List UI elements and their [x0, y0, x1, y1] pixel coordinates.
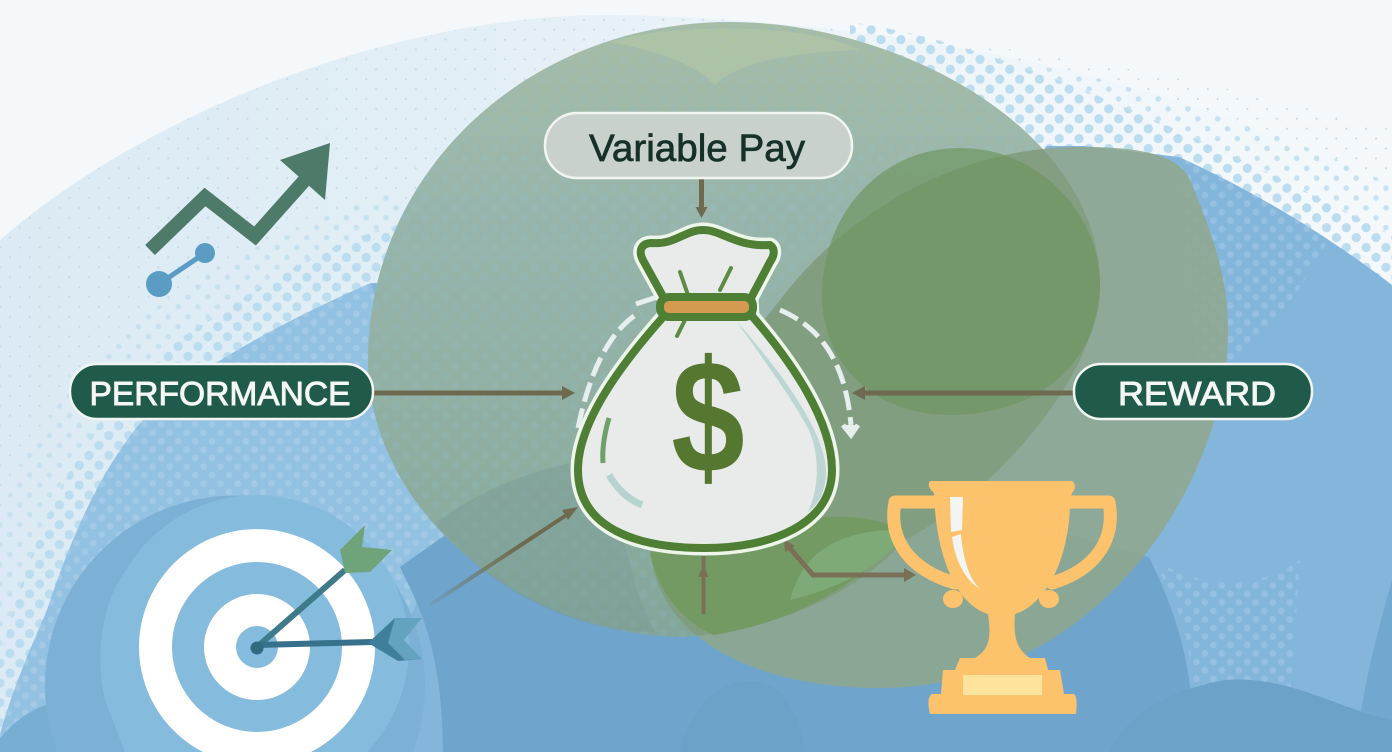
panel: reward circle	[650, 147, 1228, 688]
arrow: variable pay to bag	[696, 178, 708, 218]
icon: data dots	[146, 243, 215, 297]
icon: growth arrow	[146, 143, 330, 297]
label: variable pay	[545, 113, 852, 178]
label: performance	[70, 364, 373, 419]
icon: money bag	[578, 230, 832, 548]
arrow: bag to trophy	[784, 539, 916, 582]
arrow: upward to bag	[698, 556, 708, 614]
arrow: performance to bag	[374, 386, 575, 400]
arrow: target to bag	[430, 507, 578, 605]
icon: target with arrows	[45, 495, 425, 752]
panel: overlap blob	[822, 148, 1100, 415]
label: variable pay: Variable Pay	[589, 128, 805, 170]
panel: lower green highlight	[790, 530, 905, 600]
label: performance: PERFORMANCE	[90, 375, 350, 412]
icon: trophy	[894, 481, 1110, 714]
arrow: reward to bag	[852, 386, 1074, 400]
panel: variable pay circle	[368, 22, 1100, 637]
panel: lower-left lobe	[435, 458, 655, 632]
panel: top leaf shading	[610, 28, 860, 85]
icon: dashed cycle arrows	[578, 296, 858, 435]
panel: overlap tint	[650, 149, 1100, 636]
panel: lower green lobe	[650, 517, 905, 635]
label: reward: REWARD	[1118, 375, 1276, 412]
label: reward	[1074, 364, 1312, 419]
dollar sign: $	[671, 328, 745, 507]
